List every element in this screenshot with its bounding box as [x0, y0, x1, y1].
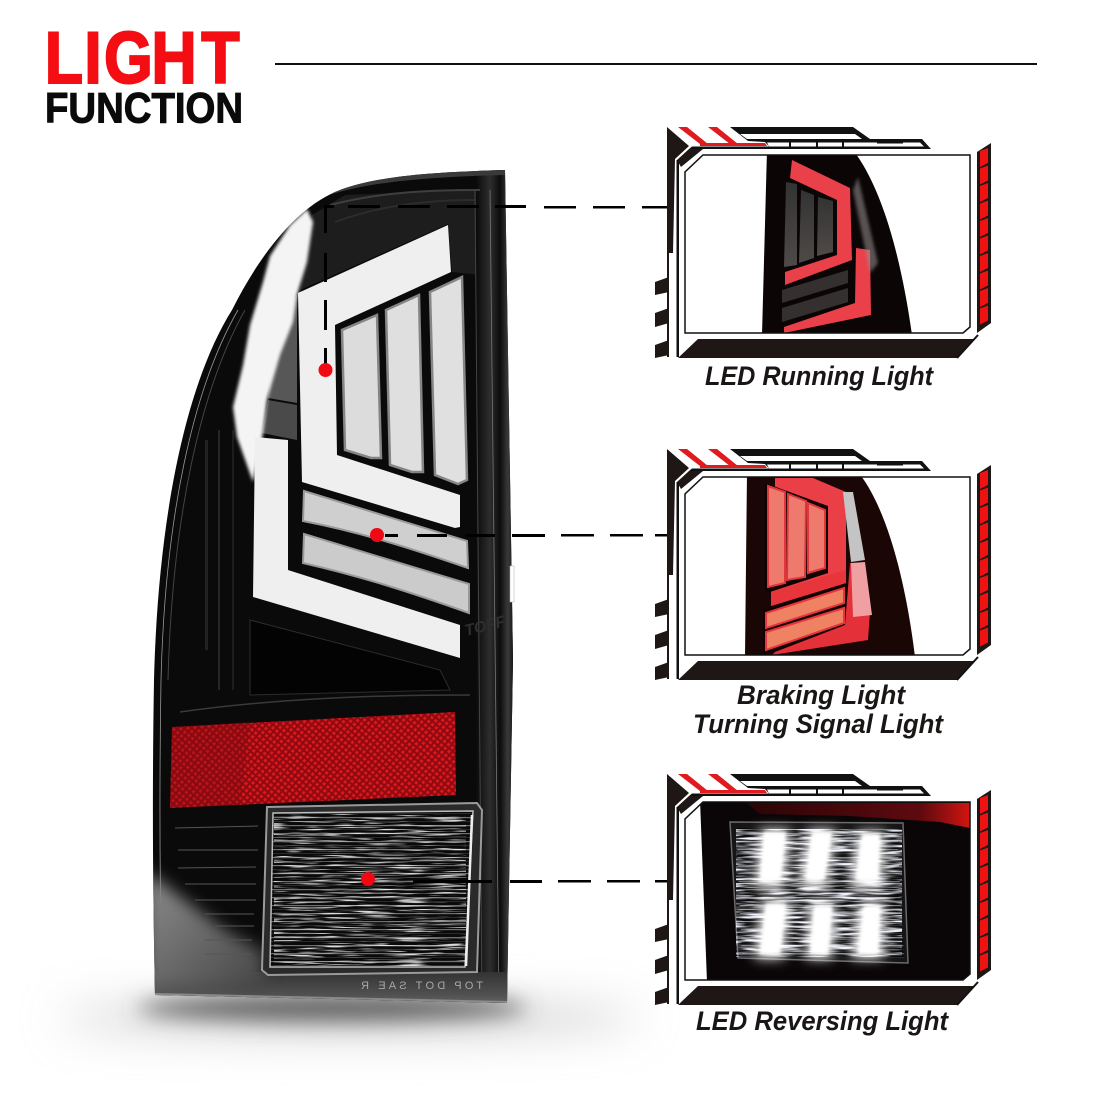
caption: Braking Light	[737, 680, 906, 710]
upper white light guide	[298, 225, 460, 528]
panel: braking and turning signal light	[655, 449, 991, 739]
angled lens 2	[303, 534, 469, 613]
side clip	[510, 566, 514, 602]
callout line: reversing light	[413, 880, 668, 883]
glare streak	[233, 209, 313, 482]
title	[45, 18, 243, 133]
vertical lens 1	[342, 315, 381, 458]
title rule	[275, 63, 1037, 65]
smoked glass below glare	[262, 400, 297, 440]
marker dot: running light	[318, 363, 332, 377]
marker dot: reversing light	[361, 872, 375, 886]
lamp body	[153, 170, 513, 1003]
caption: Turning Signal Light	[693, 709, 944, 739]
vertical lens 2	[386, 295, 423, 472]
callout line: running light	[324, 205, 668, 368]
lamp ground shadow	[60, 995, 640, 1032]
panel frame	[655, 449, 991, 680]
red reflector	[170, 712, 456, 808]
lower white light guide	[253, 437, 460, 658]
tail light product	[145, 165, 516, 1005]
reverse lens	[262, 803, 482, 975]
panel: LED reversing light	[655, 774, 991, 1036]
watermark: TOFF	[463, 613, 508, 640]
callout line: braking light	[385, 534, 668, 537]
panel frame	[655, 774, 991, 1005]
panel photo: braking light	[745, 478, 915, 654]
caption: LED Reversing Light	[696, 1006, 949, 1036]
caption: LED Running Light	[705, 361, 934, 391]
angled lens 1	[303, 491, 468, 568]
panel: LED running light	[655, 127, 991, 391]
panel photo: reversing light	[685, 800, 972, 982]
caption	[693, 680, 944, 739]
panel photo: running light	[762, 156, 912, 332]
title: FUNCTION	[45, 86, 243, 132]
vertical lens 3	[430, 277, 467, 484]
mirrored moulded text: TOP DOT SAE R	[361, 980, 483, 992]
marker dot: braking light	[370, 528, 384, 542]
title: LIGHT	[45, 18, 240, 99]
panel frame	[655, 127, 991, 358]
